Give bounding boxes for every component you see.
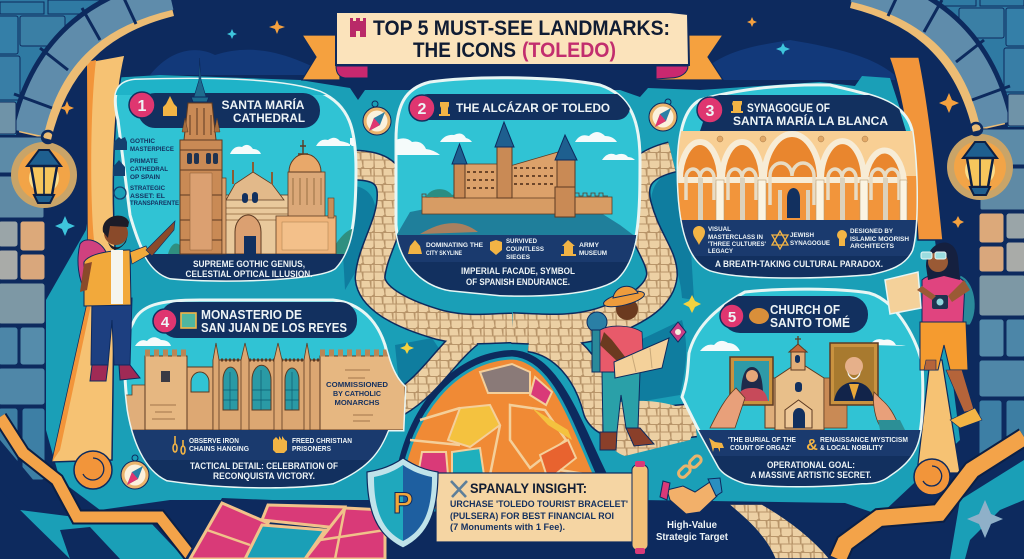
fortress on hill: [396, 122, 640, 262]
icon: compass between panels 2 and 3: [649, 99, 677, 131]
feature: renaissance mysticism: & LOCAL NOBILITY: [820, 445, 883, 452]
feature: sieges: [490, 238, 544, 261]
deep water pools: [340, 168, 694, 412]
heading: Church of Santo Tomé: CHURCH OF: [770, 303, 840, 317]
feature: freed prisoners: [273, 436, 352, 453]
label: high-value target: [656, 519, 728, 543]
scroll right: [889, 57, 960, 495]
teal ground: [46, 75, 960, 515]
callout body: [450, 499, 628, 533]
stone wall and lantern left: [0, 0, 170, 480]
callout body: URCHASE 'TOLEDO TOURIST BRACELET': [450, 499, 628, 510]
scroll left: [52, 55, 125, 489]
heading: Church of Santo Tomé: [720, 303, 850, 330]
heading: Synagogue: SYNAGOGUE OF: [747, 101, 830, 115]
feature: skyline: DOMINATING THE: [426, 242, 483, 249]
distant hills: [150, 40, 900, 80]
feature: moorish architects: DESIGNED BY: [850, 228, 894, 235]
central city map: [395, 350, 610, 520]
header pill: [138, 93, 320, 128]
note: commissioned: COMMISSIONED: [326, 380, 389, 389]
feature list: cathedral: OP SPAIN: [130, 174, 160, 181]
feature: iron chains: [173, 436, 250, 454]
callout body: (7 Monuments with 1 Fee).: [450, 522, 565, 533]
title banner: (TOLEDO): [522, 39, 616, 62]
feature: skyline: CITY SKYLINE: [426, 250, 462, 257]
heading: Santa María Cathedral: 1: [138, 98, 147, 115]
bottom path: [728, 504, 830, 559]
icon: sparkle watermark: [967, 500, 1003, 538]
header band: [700, 95, 906, 131]
icon: crossed swords: [451, 481, 467, 497]
caption: alcázar: [461, 266, 575, 287]
panel 1: Santa María Cathedral: [112, 58, 370, 284]
bottom map left: [185, 498, 395, 559]
feature: three cultures: LEGACY: [708, 248, 734, 255]
icon: compass lower left: [121, 455, 149, 489]
character: explorer pointing: [78, 216, 175, 381]
feature list: cathedral: ASSET: EL: [130, 193, 165, 200]
painting: burial of the count: [730, 357, 773, 405]
icon: castle: [350, 18, 366, 37]
heading: Santa María Cathedral: [129, 92, 305, 125]
feature list: cathedral: GOTHIC: [130, 138, 155, 145]
panel 2: The Alcázar of Toledo: [396, 78, 646, 298]
pink map fragment: [418, 352, 441, 382]
feature: sieges: SIEGES: [506, 254, 530, 261]
heading: Monasterio: MONASTERIO DE: [201, 308, 302, 322]
caption: monasterio: TACTICAL DETAIL: CELEBRATION OF: [190, 461, 339, 471]
caption: cathedral: CELESTIAL OPTICAL ILLUSION.: [186, 269, 312, 279]
feature: skyline: [408, 240, 483, 257]
feature: three cultures: 'THREE CULTURES': [708, 241, 766, 248]
feature list: cathedral: TRANSPARENTE: [130, 200, 180, 207]
feature: renaissance mysticism: RENAISSANCE MYSTICISM: [820, 437, 908, 444]
heading: Synagogue: 3: [706, 103, 715, 120]
ribbon right: [655, 35, 723, 80]
scroll roll right: [914, 459, 950, 495]
icon: chain links: [677, 454, 703, 479]
icon: shield: P: [393, 487, 413, 520]
heading: Santa María Cathedral: CATHEDRAL: [233, 113, 305, 125]
feature: moorish architects: [837, 228, 909, 250]
heading: Church of Santo Tomé: 5: [728, 309, 736, 326]
info strip: [680, 430, 925, 456]
caption: church: A MASSIVE ARTISTIC SECRET.: [750, 470, 872, 480]
label: high-value target: High-Value: [667, 519, 717, 531]
insight callout: [367, 458, 648, 554]
feature: jewish synagogue: JEWISH: [790, 232, 814, 239]
scroll end roll: [632, 461, 648, 554]
feature: burial of count: 'THE BURIAL OF THE: [728, 437, 796, 444]
callout heading: SPANALY INSIGHT:: [470, 480, 587, 496]
panel 4: Monasterio de San Juan de los Reyes: [120, 300, 410, 492]
clouds: [396, 132, 635, 160]
caption: alcázar: IMPERIAL FACADE, SYMBOL: [461, 266, 575, 276]
feature: army museum: ARMY: [579, 242, 599, 249]
feature list: cathedral: CATHEDRAL: [130, 166, 168, 173]
icon: shield: [367, 458, 438, 548]
hands holding paintings: [710, 388, 905, 430]
feature: jewish synagogue: SYNAGOGUE: [790, 240, 831, 247]
caption: monasterio: [190, 461, 339, 481]
character: tourist with camera: [885, 242, 982, 428]
caption: alcázar: OF SPANISH ENDURANCE.: [466, 277, 570, 287]
heading: Synagogue: SANTA MARÍA LA BLANCA: [733, 113, 888, 128]
caption bar: [146, 254, 344, 280]
feature: freed prisoners: FREED CHRISTIAN: [292, 438, 352, 445]
feature: sieges: SURVIVED: [506, 238, 537, 245]
cloud: [135, 337, 171, 346]
rocky ground right: [835, 437, 1024, 559]
decorative stars: [55, 17, 964, 354]
header pill: [415, 94, 630, 120]
feature: three cultures: [693, 226, 766, 255]
info strip: [676, 220, 920, 256]
heading: Monasterio: [153, 308, 347, 335]
feature: iron chains: CHAINS HANGING: [189, 446, 250, 453]
heading: Church of Santo Tomé: SANTO TOMÉ: [770, 315, 850, 330]
info strip: [120, 430, 388, 460]
feature list: cathedral: [113, 137, 180, 207]
cobblestone paths: [350, 157, 830, 559]
title banner: [302, 12, 723, 80]
feature: three cultures: VISUAL: [708, 226, 731, 233]
info strip: [396, 235, 646, 263]
header pill: [722, 296, 868, 333]
caption: church: [750, 460, 872, 480]
feature: army museum: MUSEUM: [579, 250, 607, 257]
cathedral tower: [180, 58, 226, 254]
moorish arches: [676, 131, 920, 221]
note: commissioned: [326, 380, 389, 407]
feature: burial of count: COUNT OF ORGAZ': [730, 445, 791, 452]
caption: synagogue: A BREATH-TAKING CULTURAL PARADOX.: [715, 259, 883, 269]
painting: portrait: [830, 343, 878, 405]
icon: compass between panels 1 and 2: [363, 101, 391, 135]
feature: jewish synagogue: [772, 231, 831, 249]
caption: monasterio: RECONQUISTA VICTORY.: [213, 471, 315, 481]
caption: church: OPERATIONAL GOAL:: [767, 460, 855, 470]
feature: three cultures: MASTERCLASS IN: [708, 234, 763, 241]
caption: cathedral: [186, 259, 312, 279]
heading: The Alcázar of Toledo: [409, 95, 610, 121]
heading: The Alcázar of Toledo: 2: [418, 101, 427, 118]
heading: Monasterio: SAN JUAN DE LOS REYES: [201, 321, 347, 335]
feature: moorish architects: ARCHITECTS: [850, 243, 895, 250]
scroll roll left: [74, 451, 112, 489]
icon: handshake: [660, 478, 722, 514]
rocky ground left: [0, 417, 193, 559]
feature: renaissance mysticism: &: [806, 437, 818, 454]
title banner: THE ICONS: [413, 39, 516, 62]
scroll parchment: [436, 473, 641, 542]
panel 3: Synagogue of Santa María la Blanca: [676, 85, 920, 282]
clouds: [700, 339, 906, 351]
church: [765, 336, 847, 430]
heading: Synagogue: [697, 97, 888, 128]
feature: renaissance mysticism: [806, 437, 908, 454]
feature list: cathedral: MASTERPIECE: [130, 146, 175, 153]
note: commissioned: BY CATHOLIC: [333, 389, 381, 398]
feature list: cathedral: STRATEGIC: [130, 185, 165, 192]
feature: burial of count: [709, 437, 796, 452]
feature: army museum: [561, 240, 607, 257]
note: commissioned: MONARCHS: [334, 398, 380, 407]
heading: Monasterio: 4: [161, 314, 170, 331]
clouds: [230, 138, 358, 154]
feature list: cathedral: PRIMATE: [130, 158, 159, 165]
feature: sieges: COUNTLESS: [506, 246, 544, 253]
ribbon left: [302, 35, 340, 80]
header pill: [160, 302, 357, 338]
panel 5: Church of Santo Tomé: [680, 289, 925, 490]
heading: The Alcázar of Toledo: THE ALCÁZAR OF TOLEDO: [456, 100, 610, 115]
feature: iron chains: OBSERVE IRON: [189, 438, 239, 445]
heading: Santa María Cathedral: SANTA MARÍA: [222, 99, 304, 112]
label: high-value target: Strategic Target: [656, 531, 728, 543]
character: traveller reading map: [587, 286, 669, 450]
feature: moorish architects: ISLAMIC MOORISH: [850, 236, 909, 243]
title text: TOP 5 MUST-SEE LANDMARKS:: [373, 17, 670, 40]
cathedral facade: [168, 140, 370, 254]
stone wall and lantern right: [854, 0, 1024, 472]
callout body: (PULSERA) FOR BEST FINANCIAL ROI: [450, 511, 614, 522]
caption: cathedral: SUPREME GOTHIC GENIUS,: [193, 259, 305, 269]
feature: freed prisoners: PRISONERS: [292, 446, 331, 453]
monastery walls: [120, 343, 405, 430]
